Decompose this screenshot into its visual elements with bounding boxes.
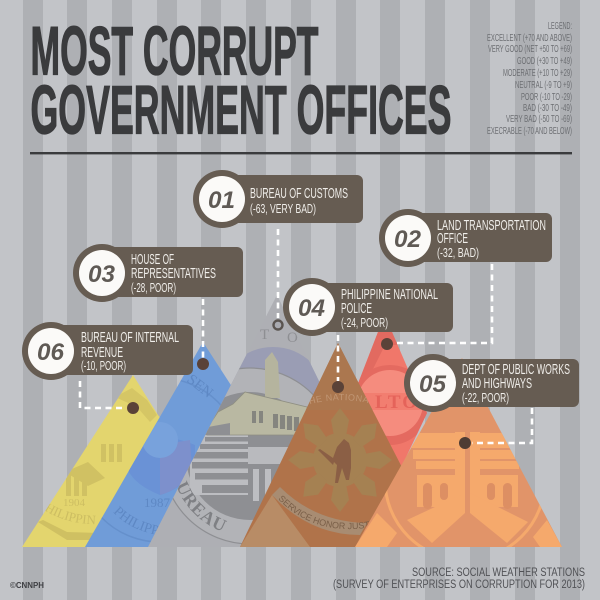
label 03: House of Representatives: HOUSE OF — [131, 251, 174, 268]
legend: BAD (-30 TO -49) — [523, 103, 572, 114]
connector: Bureau of Internal Revenue — [80, 381, 139, 414]
triangle: Land Transportation Office seal (red): LTO — [375, 392, 419, 413]
triangle: Philippine National Police seal (brown): SERVICE HONOR JUSTICE — [279, 496, 369, 530]
label 05: Dept of Public Works and Highways: (-22, POOR) — [462, 390, 509, 405]
label 01: Bureau of Customs: 01 — [208, 187, 235, 214]
credit: ©CNNPH — [10, 581, 44, 590]
triangle: Bureau of Customs seal (gray): T — [260, 327, 269, 343]
label 01: Bureau of Customs: (-63, VERY BAD) — [250, 201, 316, 216]
triangle: Bureau of Customs seal (gray): UREAU — [178, 480, 227, 530]
triangle: House of Representatives seal (blue): SEN — [184, 372, 216, 402]
triangle: Philippine National Police seal (brown): THE NATIONAL — [310, 394, 368, 404]
connector: House of Representatives — [197, 299, 209, 370]
label 06: Bureau of Internal Revenue — [22, 322, 193, 380]
triangle: Philippine National Police seal (brown) — [240, 343, 401, 547]
label 05: Dept of Public Works and Highways — [404, 354, 579, 412]
label 02: Land Transportation Office: OFFICE — [437, 230, 468, 247]
connector: Dept of Public Works and Highways — [459, 408, 532, 449]
triangle: Bureau of Customs seal (gray) — [148, 296, 320, 547]
label 04: Philippine National Police: PHILIPPINE NATIONAL — [341, 286, 438, 303]
label 06: Bureau of Internal Revenue: 06 — [37, 339, 65, 366]
label 02: Land Transportation Office: (-32, BAD) — [437, 245, 479, 260]
label 01: Bureau of Customs: BUREAU OF CUSTOMS — [250, 185, 348, 202]
connector: Land Transportation Office — [381, 264, 492, 350]
label 03: House of Representatives — [73, 244, 243, 302]
triangle: House of Representatives seal (blue): 1987 — [144, 495, 170, 510]
label 02: Land Transportation Office — [379, 209, 552, 267]
connector: Bureau of Customs — [274, 229, 282, 330]
legend: LEGEND: — [548, 21, 572, 32]
triangle: Bureau of Internal Revenue seal (yellow): 1904 — [63, 497, 86, 509]
label 04: Philippine National Police — [283, 278, 453, 336]
label 03: House of Representatives: (-28, POOR) — [131, 280, 176, 295]
title: MOST CORRUPT — [30, 12, 318, 90]
label 06: Bureau of Internal Revenue: REVENUE — [81, 344, 123, 361]
triangle: Bureau of Customs seal (gray): O — [287, 330, 298, 346]
triangle: Bureau of Internal Revenue seal (yellow): HILIPPIN — [45, 504, 96, 524]
label 05: Dept of Public Works and Highways: AND HIGHWAYS — [462, 375, 532, 392]
label 03: House of Representatives: REPRESENTATIVES — [131, 265, 216, 282]
triangle: Bureau of Internal Revenue seal (yellow) — [22, 375, 160, 547]
triangle: Department of Public Works and Highways seal (orange) — [355, 358, 562, 547]
source note — [333, 567, 585, 591]
legend — [487, 21, 572, 137]
label 04: Philippine National Police: POLICE — [341, 300, 372, 317]
label 04: Philippine National Police: 04 — [298, 295, 325, 322]
label 03: House of Representatives: 03 — [88, 261, 116, 288]
label 02: Land Transportation Office: 02 — [394, 226, 422, 253]
label 01: Bureau of Customs — [193, 170, 363, 228]
label 06: Bureau of Internal Revenue: (-10, POOR) — [81, 358, 126, 373]
label 06: Bureau of Internal Revenue: BUREAU OF INTERNAL — [81, 329, 179, 346]
title — [30, 12, 452, 148]
triangle: House of Representatives seal (blue) — [85, 344, 231, 547]
label 04: Philippine National Police: (-24, POOR) — [341, 315, 388, 330]
label 05: Dept of Public Works and Highways: 05 — [419, 371, 447, 398]
triangle: Land Transportation Office seal (red) — [358, 332, 427, 466]
connector: Philippine National Police — [332, 335, 344, 393]
icon: police sun emblem — [288, 408, 392, 512]
